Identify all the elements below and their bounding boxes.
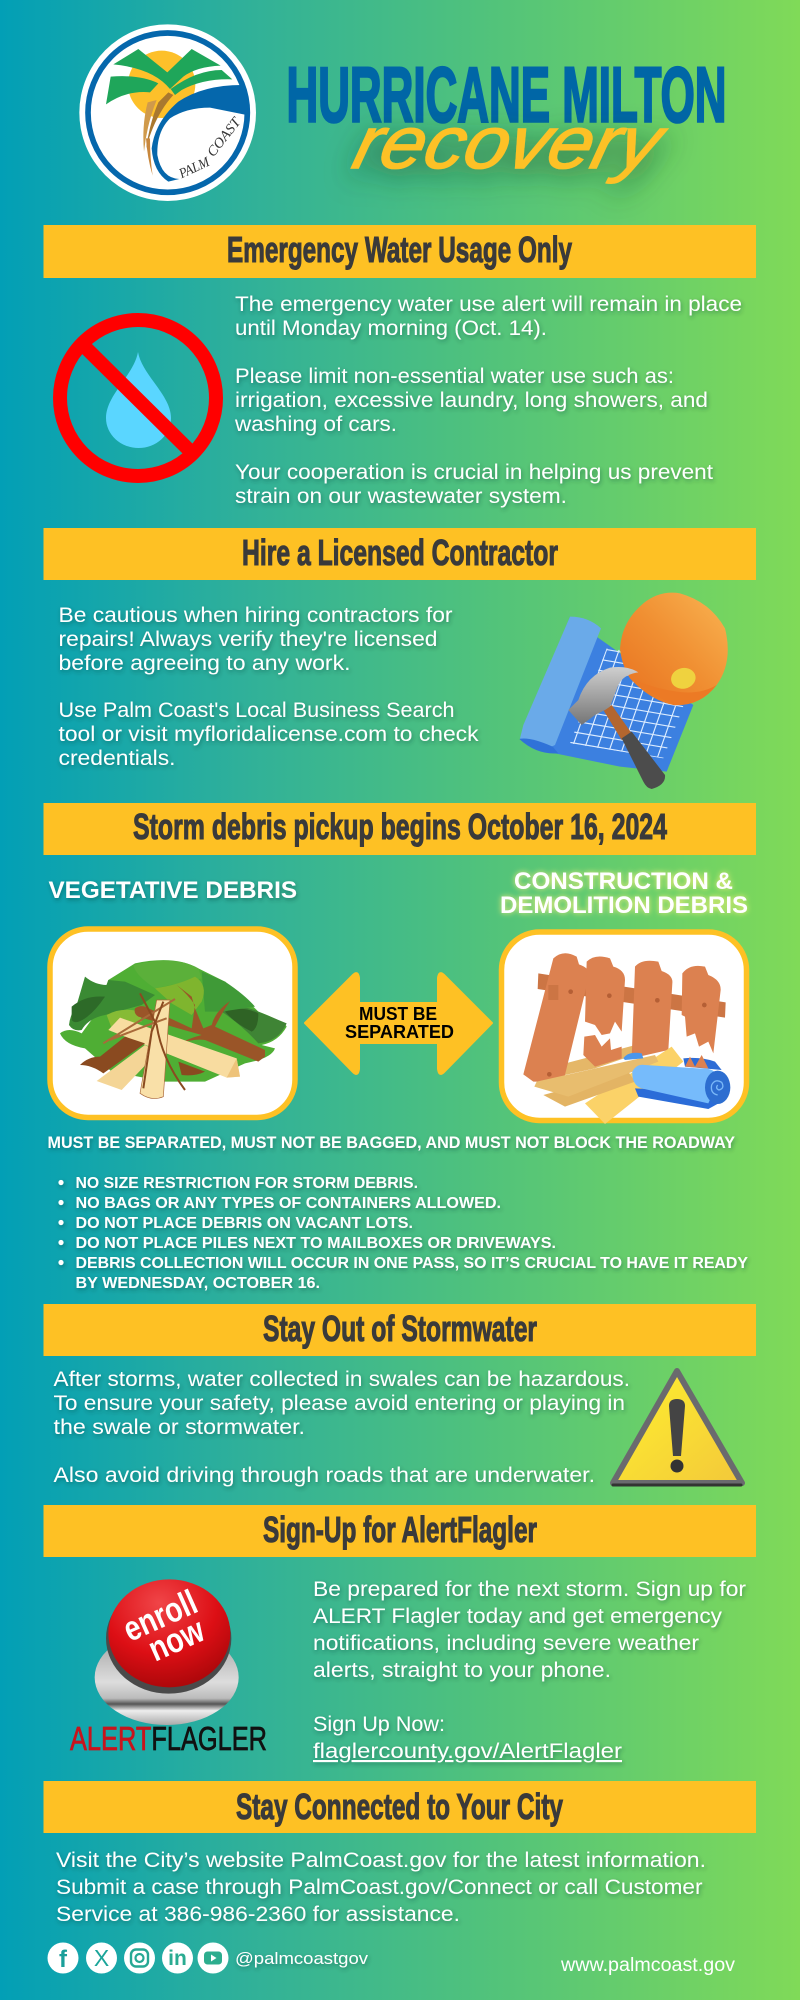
list: debris rules [58, 1175, 748, 1292]
title: recovery script: recovery [346, 101, 675, 184]
text block: water alert: irrigation, excessive laundry, long showers, and [235, 389, 708, 412]
text block: AlertFlagler sign up: ALERT Flagler today and get emergency [313, 1605, 723, 1628]
text block: AlertFlagler sign up: notifications, including severe weather [313, 1632, 699, 1655]
social icons [48, 1942, 228, 1974]
website url: www.palmcoast.gov [560, 1955, 736, 1976]
logo: Palm Coast seal: COAST [205, 114, 245, 160]
logo: Palm Coast seal [79, 24, 256, 201]
heading bar: Hire a Licensed Contractor: Hire a Licensed Contractor [242, 532, 558, 573]
list: debris rules: DO NOT PLACE PILES NEXT TO MAILBOXES OR DRIVEWAYS. [76, 1235, 556, 1252]
social handle: @palmcoastgov [235, 1950, 369, 1968]
text block: stormwater warning: After storms, water collected in swales can be hazardous. [54, 1368, 630, 1391]
heading bar: Emergency Water Usage Only: Emergency Water Usage Only [227, 229, 572, 270]
label: construction and demolition debris: DEMOLITION DEBRIS [500, 892, 748, 919]
card: vegetative debris illustration [50, 929, 295, 1118]
arrow: double arrow must be separated: SEPARATED [345, 1021, 454, 1042]
text block: contractor advice: Be cautious when hiring contractors for [58, 604, 452, 627]
label: construction and demolition debris [500, 868, 748, 919]
text block: water alert: Your cooperation is crucial in helping us prevent [235, 461, 713, 484]
text block: stay connected: Visit the City’s website PalmCoast.gov for the latest information. [56, 1849, 706, 1872]
text block: water alert: strain on our wastewater system. [235, 485, 567, 508]
text block: contractor advice: before agreeing to any work. [58, 652, 350, 675]
card: construction debris illustration [502, 932, 746, 1124]
text block: contractor advice: Use Palm Coast's Local Business Search [58, 699, 454, 722]
note: must be separated: MUST BE SEPARATED, MUST NOT BE BAGGED, AND MUST NOT BLOCK THE ROADWAY [48, 1133, 736, 1152]
icon: enroll now button [95, 1579, 239, 1725]
list: debris rules: NO SIZE RESTRICTION FOR STORM DEBRIS. [76, 1175, 418, 1192]
list: debris rules: NO BAGS OR ANY TYPES OF CONTAINERS ALLOWED. [76, 1195, 501, 1212]
text block: water alert: washing of cars. [234, 413, 397, 436]
text block: stay connected [56, 1849, 706, 1926]
heading bar: Sign-Up for AlertFlagler: Sign-Up for AlertFlagler [263, 1509, 537, 1550]
list: debris rules: BY WEDNESDAY, OCTOBER 16. [76, 1275, 320, 1292]
text block: AlertFlagler sign up: Sign Up Now: [313, 1713, 445, 1736]
heading bar: Stay Out of Stormwater [44, 1304, 756, 1356]
text block: water alert: until Monday morning (Oct. 14). [235, 317, 547, 340]
text block: contractor advice: repairs! Always verify they're licensed [58, 628, 438, 651]
label: vegetative debris: VEGETATIVE DEBRIS [48, 877, 297, 904]
logo: Palm Coast seal: PALM [176, 154, 213, 182]
text block: contractor advice: tool or visit myfloridalicense.com to check [58, 723, 479, 746]
heading bar: Stay Connected to Your City [44, 1781, 756, 1833]
arrow: double arrow must be separated [305, 973, 492, 1074]
text block: water alert: The emergency water use alert will remain in place [235, 293, 742, 316]
social icons: f [59, 1946, 68, 1973]
list: debris rules: DO NOT PLACE DEBRIS ON VACANT LOTS. [76, 1215, 413, 1232]
text block: stormwater warning [54, 1368, 630, 1487]
text block: contractor advice: credentials. [58, 747, 176, 770]
heading bar: Sign-Up for AlertFlagler [44, 1505, 756, 1557]
text block: AlertFlagler sign up: Be prepared for the next storm. Sign up for [313, 1578, 746, 1601]
heading bar: Stay Connected to Your City: Stay Connected to Your City [236, 1786, 563, 1827]
heading bar: Hire a Licensed Contractor [44, 528, 756, 580]
icon: blueprint, helmet and hammer [519, 593, 728, 789]
social icons: in [168, 1947, 187, 1970]
label: construction and demolition debris: CONSTRUCTION & [514, 868, 733, 895]
text block: stormwater warning: Also avoid driving through roads that are underwater. [54, 1464, 595, 1487]
icon: enroll now button: enroll [117, 1583, 203, 1649]
text block: water alert: Please limit non-essential water use such as: [235, 365, 674, 388]
heading bar: Stay Out of Stormwater: Stay Out of Stormwater [263, 1308, 537, 1349]
icon: warning triangle [613, 1371, 742, 1485]
heading bar: Storm debris pickup [44, 803, 756, 855]
icon: enroll now button: now [142, 1610, 211, 1669]
heading bar: Emergency Water Usage Only [44, 225, 756, 278]
icon: no water [60, 320, 216, 476]
text block: stormwater warning: the swale or stormwater. [54, 1416, 305, 1439]
text block: contractor advice [58, 604, 479, 770]
text block: AlertFlagler sign up: alerts, straight to your phone. [313, 1659, 611, 1682]
list: debris rules: DEBRIS COLLECTION WILL OCCUR IN ONE PASS, SO IT’S CRUCIAL TO HAVE IT READY [76, 1255, 748, 1272]
logo text: AlertFlagler: ALERTFLAGLER [70, 1720, 267, 1757]
text block: stormwater warning: To ensure your safety, please avoid entering or playing in [54, 1392, 625, 1415]
text block: AlertFlagler sign up: flaglercounty.gov/AlertFlagler [313, 1740, 622, 1763]
text block: stay connected: Service at 386-986-2360 for assistance. [56, 1903, 460, 1926]
social icons: X [94, 1945, 109, 1971]
text block: stay connected: Submit a case through PalmCoast.gov/Connect or call Customer [56, 1876, 702, 1899]
arrow: double arrow must be separated: MUST BE [359, 1003, 437, 1024]
text block: water alert [234, 293, 742, 508]
text block: AlertFlagler sign up [313, 1578, 746, 1763]
